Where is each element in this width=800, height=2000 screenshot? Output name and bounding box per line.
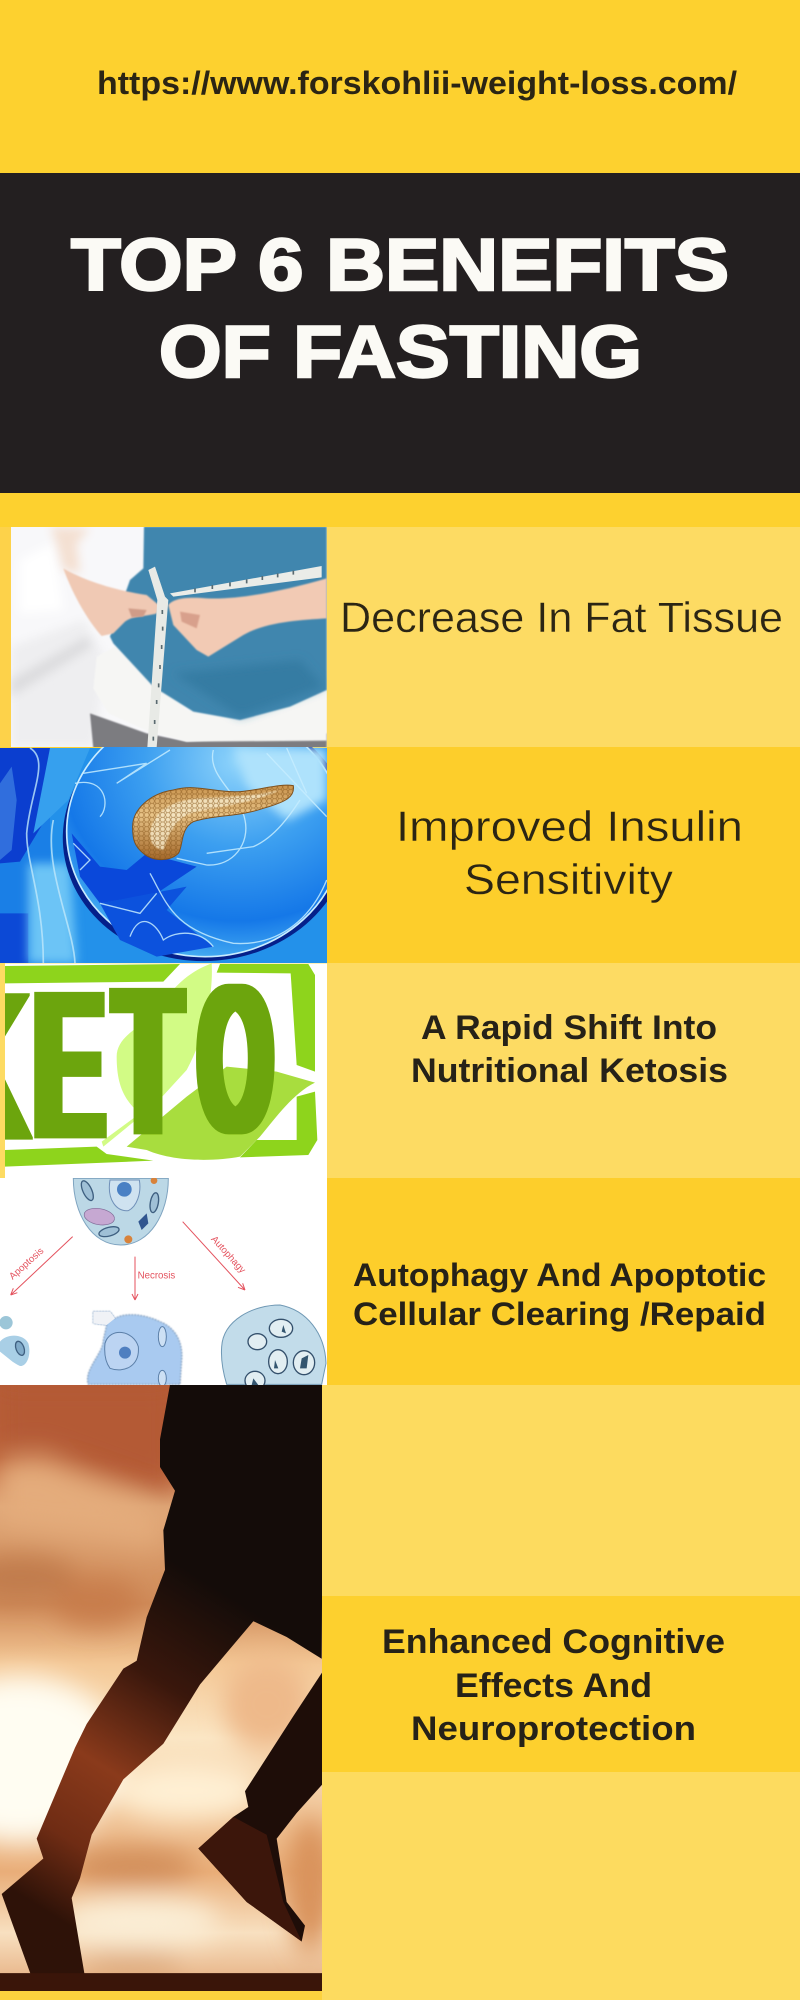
arrow labels: Autophagy bbox=[208, 1234, 248, 1276]
image: pancreas bbox=[0, 747, 327, 963]
arrow labels: Necrosis bbox=[138, 1270, 175, 1281]
label: decrease in fat tissue: Decrease In Fat Tissue bbox=[340, 594, 783, 642]
panel: enhanced cognitive effects and neuroprotection bbox=[0, 1380, 800, 2000]
panel: decrease in fat tissue bbox=[0, 527, 800, 750]
necrotic cell bbox=[88, 1312, 182, 1386]
title: OF FASTING bbox=[159, 312, 642, 393]
label: a rapid shift into nutritional ketosis: A Rapid Shift Into bbox=[421, 1009, 717, 1047]
title panel bbox=[0, 173, 800, 493]
label: autophagy and apoptotic cellular clearing repaid: Cellular Clearing /Repaid bbox=[353, 1296, 766, 1332]
label: enhanced cognitive effects and neuroprotection: Neuroprotection bbox=[411, 1710, 696, 1748]
word: keto: E bbox=[34, 948, 104, 1183]
yellow spacer band bbox=[0, 493, 800, 527]
arrow labels: Apoptosis bbox=[7, 1246, 46, 1282]
label: a rapid shift into nutritional ketosis: Nutritional Ketosis bbox=[411, 1052, 728, 1090]
autophagic cell bbox=[221, 1305, 326, 1390]
panel: improved insulin sensitivity bbox=[0, 747, 740, 963]
label: enhanced cognitive effects and neuroprotection: Enhanced Cognitive bbox=[382, 1623, 725, 1661]
word: keto: O bbox=[199, 942, 272, 1176]
word: keto: T bbox=[114, 943, 182, 1178]
word: keto bbox=[5, 984, 275, 1140]
label: improved insulin sensitivity: Sensitivity bbox=[464, 856, 674, 904]
label: enhanced cognitive effects and neuroprotection: Effects And bbox=[455, 1667, 652, 1705]
parent cell bbox=[73, 1177, 168, 1245]
image: cell death diagram bbox=[0, 1177, 327, 1390]
header band with website url bbox=[0, 0, 800, 173]
image: keto logo bbox=[5, 963, 327, 1178]
label: improved insulin sensitivity: Improved Insulin bbox=[396, 803, 743, 851]
panel: autophagy and apoptotic cellular clearing bbox=[0, 1177, 800, 1390]
arrow labels bbox=[7, 1234, 248, 1282]
photo: runner silhouette bbox=[0, 1380, 333, 1994]
photo: waist measurement bbox=[0, 527, 327, 750]
panel: rapid shift into nutritional ketosis bbox=[0, 963, 800, 1178]
title: TOP 6 BENEFITS bbox=[71, 225, 729, 306]
label: autophagy and apoptotic cellular clearing repaid: Autophagy And Apoptotic bbox=[353, 1257, 766, 1293]
apoptotic fragments bbox=[0, 1316, 29, 1366]
arrows bbox=[11, 1222, 245, 1300]
website url: https://www.forskohlii-weight-loss.com/ bbox=[97, 65, 737, 101]
